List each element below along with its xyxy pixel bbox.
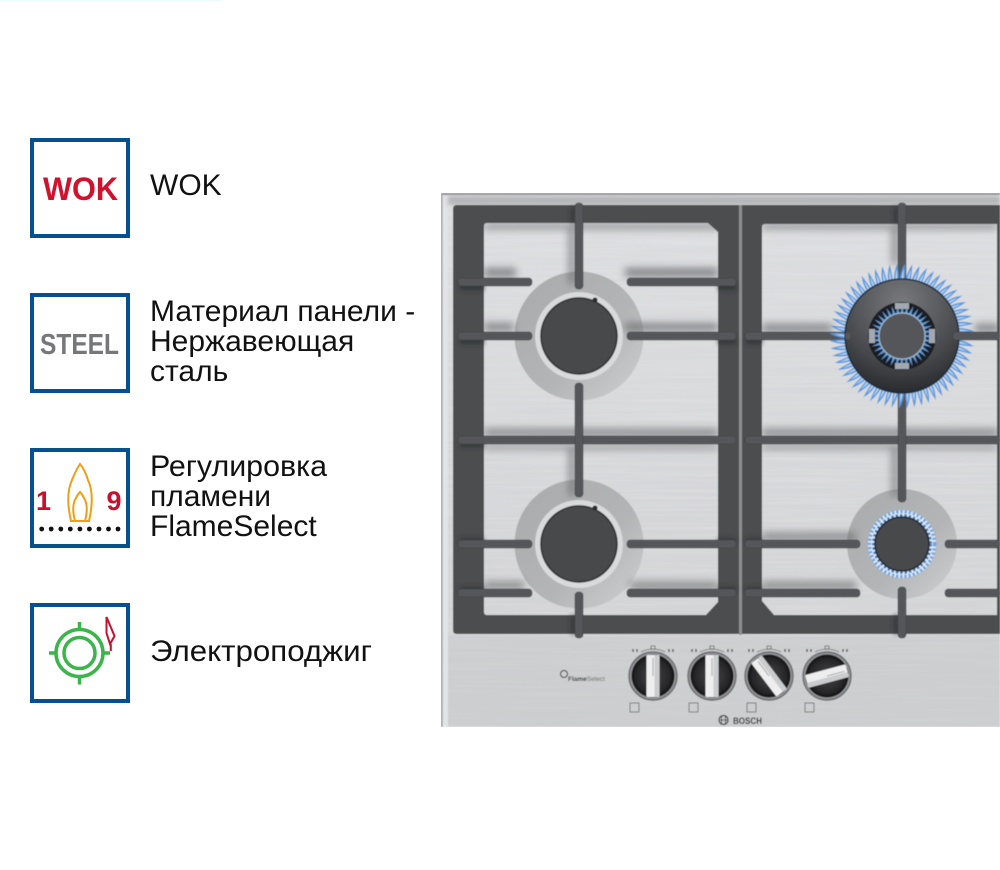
label: panel material: Нержавеющая [150, 325, 354, 358]
hob photo [441, 193, 1000, 727]
icon: FlameSelect: 1 [36, 486, 51, 516]
label: flame control: FlameSelect [150, 510, 317, 543]
icon: electric ignition [32, 605, 128, 701]
burner position pictograms [630, 703, 814, 712]
small burner with blue flames [868, 510, 936, 578]
cast-iron grate [453, 203, 1000, 638]
FlameSelect logo: FlameSelect [568, 676, 605, 683]
FlameSelect logo [560, 670, 605, 683]
knob 4 [803, 646, 851, 700]
burner rings [514, 272, 957, 608]
wok burner supports [845, 332, 1000, 340]
label: panel material: сталь [150, 355, 228, 388]
knob 1 [629, 646, 677, 700]
bar shadows [484, 224, 999, 589]
steel plate [441, 193, 1000, 727]
icon: FlameSelect: 9 [106, 486, 122, 516]
icon: FlameSelect [32, 450, 128, 546]
icon: WOK [32, 140, 128, 236]
wok burner with blue flames [823, 257, 981, 415]
label: WOK: WOK [150, 169, 222, 202]
top edge tint [0, 0, 222, 1]
label: flame control: пламени [150, 480, 271, 513]
icon: STEEL [32, 295, 128, 391]
BOSCH logo [719, 716, 762, 727]
knob 2 [688, 646, 736, 700]
label: flame control: Регулировка [150, 450, 327, 483]
icon: WOK: WOK [43, 171, 118, 207]
knob 3 [745, 646, 793, 700]
label: panel material: Материал панели - [150, 295, 415, 328]
left front burner [535, 500, 623, 588]
icon: STEEL: STEEL [40, 329, 119, 361]
BOSCH logo: BOSCH [733, 716, 762, 727]
label: ignition: Электроподжиг [150, 635, 372, 668]
left rear burner [535, 292, 623, 380]
